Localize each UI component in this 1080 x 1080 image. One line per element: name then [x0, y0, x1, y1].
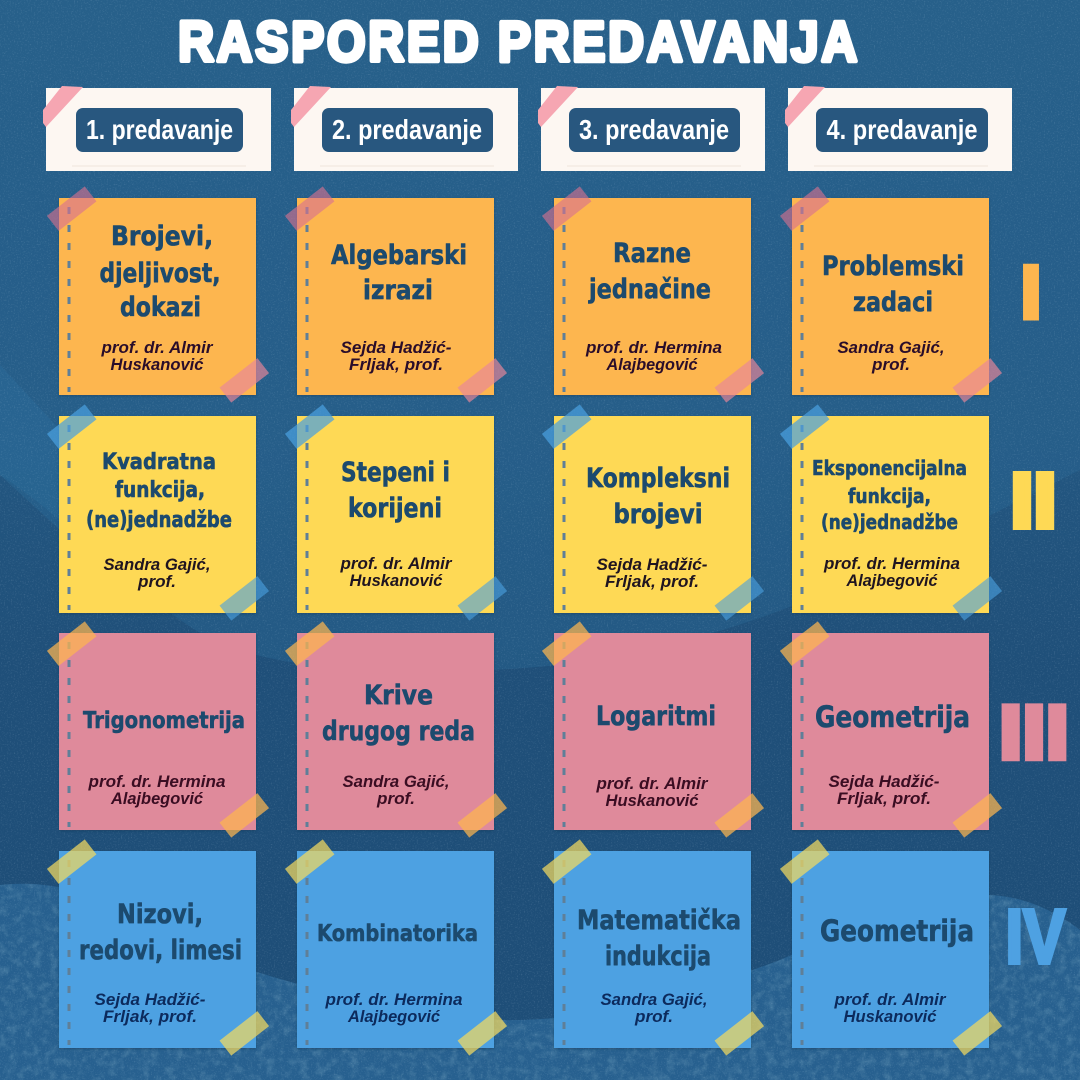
card: Eksponencijalna funkcija, (ne)jednadžbe: (ne)jednadžbe	[821, 510, 958, 534]
card: Eksponencijalna funkcija, (ne)jednadžbe: prof. dr. Hermina	[823, 554, 960, 573]
card: Algebarski izrazi: Algebarski	[331, 240, 467, 271]
card: Logaritmi: prof. dr. Almir	[595, 774, 709, 793]
card: Problemski zadaci	[780, 186, 1002, 403]
row numeral: III: III	[999, 690, 1069, 776]
card: Matematička indukcija: Matematička	[577, 905, 741, 936]
card: Eksponencijalna funkcija, (ne)jednadžbe: Alajbegović	[846, 571, 938, 590]
card: Algebarski izrazi: Sejda Hadžić-	[340, 338, 452, 357]
card: Trigonometrija: prof. dr. Hermina	[87, 772, 225, 791]
card: Krive drugog reda: Krive	[364, 680, 433, 711]
card: Geometrija (IV): Geometrija	[820, 914, 974, 948]
card: Kvadratna funkcija, (ne)jednadžbe	[47, 404, 269, 621]
header: 3. predavanje: 3. predavanje	[579, 114, 729, 145]
card: Geometrija (IV): Huskanović	[844, 1007, 937, 1026]
card: Stepeni i korijeni: Stepeni i	[341, 457, 450, 488]
card: Brojevi, djeljivost, dokazi: Brojevi,	[111, 221, 213, 252]
header: 1. predavanje: 1. predavanje	[86, 114, 233, 145]
card: Kvadratna funkcija, (ne)jednadžbe: funkcija,	[115, 478, 205, 503]
header: 4. predavanje: 4. predavanje	[826, 114, 978, 145]
card: Nizovi, redovi, limesi	[47, 839, 269, 1056]
card: Nizovi, redovi, limesi: Sejda Hadžić-	[94, 990, 206, 1009]
card: Matematička indukcija: prof.	[634, 1007, 673, 1026]
card: Razne jednačine: jednačine	[588, 274, 711, 305]
card: Matematička indukcija: indukcija	[605, 941, 711, 972]
header: 1. predavanje	[43, 86, 271, 171]
card: Krive drugog reda	[285, 621, 507, 838]
card: Eksponencijalna funkcija, (ne)jednadžbe: funkcija,	[848, 484, 931, 508]
card: Krive drugog reda: drugog reda	[322, 716, 475, 747]
card: Razne jednačine: prof. dr. Hermina	[585, 338, 722, 357]
card: Nizovi, redovi, limesi: redovi, limesi	[79, 935, 242, 966]
card: Geometrija (III): Frljak, prof.	[837, 789, 931, 808]
card: Nizovi, redovi, limesi: Nizovi,	[117, 899, 203, 930]
card: Algebarski izrazi: Frljak, prof.	[349, 355, 443, 374]
card: Eksponencijalna funkcija, (ne)jednadžbe	[780, 404, 1002, 621]
card: Geometrija (III): Sejda Hadžić-	[828, 772, 940, 791]
card: Kompleksni brojevi: Kompleksni	[586, 463, 730, 494]
card: Kvadratna funkcija, (ne)jednadžbe: (ne)jednadžbe	[86, 508, 232, 533]
header: 3. predavanje	[538, 86, 765, 171]
card: Kvadratna funkcija, (ne)jednadžbe: Kvadratna	[102, 450, 216, 475]
card: Kombinatorika: Kombinatorika	[317, 921, 478, 947]
card: Kompleksni brojevi: brojevi	[614, 499, 702, 530]
card: Trigonometrija	[47, 621, 269, 838]
card: Kombinatorika: Alajbegović	[347, 1007, 441, 1026]
card: Problemski zadaci: prof.	[871, 355, 910, 374]
card: Nizovi, redovi, limesi: Frljak, prof.	[103, 1007, 197, 1026]
card: Brojevi, djeljivost, dokazi: Huskanović	[110, 355, 204, 374]
card: Stepeni i korijeni	[285, 404, 507, 621]
card: Eksponencijalna funkcija, (ne)jednadžbe: Eksponencijalna	[812, 456, 967, 480]
card: Trigonometrija: Alajbegović	[110, 789, 204, 808]
card: Logaritmi: Huskanović	[606, 791, 699, 810]
card: Problemski zadaci: zadaci	[853, 287, 933, 318]
card: Brojevi, djeljivost, dokazi	[47, 186, 269, 403]
card: Logaritmi	[542, 621, 764, 838]
card: Razne jednačine	[542, 186, 764, 403]
card: Matematička indukcija	[542, 839, 764, 1056]
card: Problemski zadaci: Sandra Gajić,	[838, 338, 944, 357]
card: Algebarski izrazi: izrazi	[363, 275, 433, 306]
header: 4. predavanje	[785, 86, 1012, 171]
card: Krive drugog reda: Sandra Gajić,	[342, 772, 450, 791]
card: Brojevi, djeljivost, dokazi: djeljivost,	[100, 258, 220, 289]
card: Krive drugog reda: prof.	[376, 789, 415, 808]
card: Brojevi, djeljivost, dokazi: prof. dr. Almir	[100, 338, 214, 357]
header: 2. predavanje	[291, 86, 518, 171]
row numeral: IV: IV	[1006, 894, 1066, 980]
card: Trigonometrija: Trigonometrija	[83, 708, 245, 734]
card: Problemski zadaci: Problemski	[822, 251, 964, 282]
card: Geometrija (IV)	[780, 839, 1002, 1056]
card: Stepeni i korijeni: korijeni	[348, 493, 442, 524]
card: Kompleksni brojevi	[542, 404, 764, 621]
card: Kombinatorika	[285, 839, 507, 1056]
card: Stepeni i korijeni: Huskanović	[350, 571, 443, 590]
title: RASPORED PREDAVANJA	[178, 11, 860, 74]
header: 2. predavanje: 2. predavanje	[332, 114, 482, 145]
row numeral: I: I	[1020, 250, 1042, 334]
card: Geometrija (III): Geometrija	[815, 700, 970, 734]
card: Stepeni i korijeni: prof. dr. Almir	[339, 554, 453, 573]
card: Kvadratna funkcija, (ne)jednadžbe: Sandra Gajić,	[104, 555, 210, 574]
card: Algebarski izrazi	[285, 186, 507, 403]
card: Matematička indukcija: Sandra Gajić,	[600, 990, 708, 1009]
card: Kompleksni brojevi: Sejda Hadžić-	[596, 555, 708, 574]
card: Razne jednačine: Alajbegović	[606, 355, 698, 374]
row numeral: II: II	[1010, 458, 1056, 544]
card: Brojevi, djeljivost, dokazi: dokazi	[120, 292, 201, 323]
card: Geometrija (III)	[780, 621, 1002, 838]
card: Kombinatorika: prof. dr. Hermina	[324, 990, 462, 1009]
card: Logaritmi: Logaritmi	[596, 701, 716, 732]
card: Razne jednačine: Razne	[613, 238, 691, 269]
card: Kvadratna funkcija, (ne)jednadžbe: prof.	[137, 572, 176, 591]
card: Kompleksni brojevi: Frljak, prof.	[605, 572, 699, 591]
card: Geometrija (IV): prof. dr. Almir	[833, 990, 947, 1009]
